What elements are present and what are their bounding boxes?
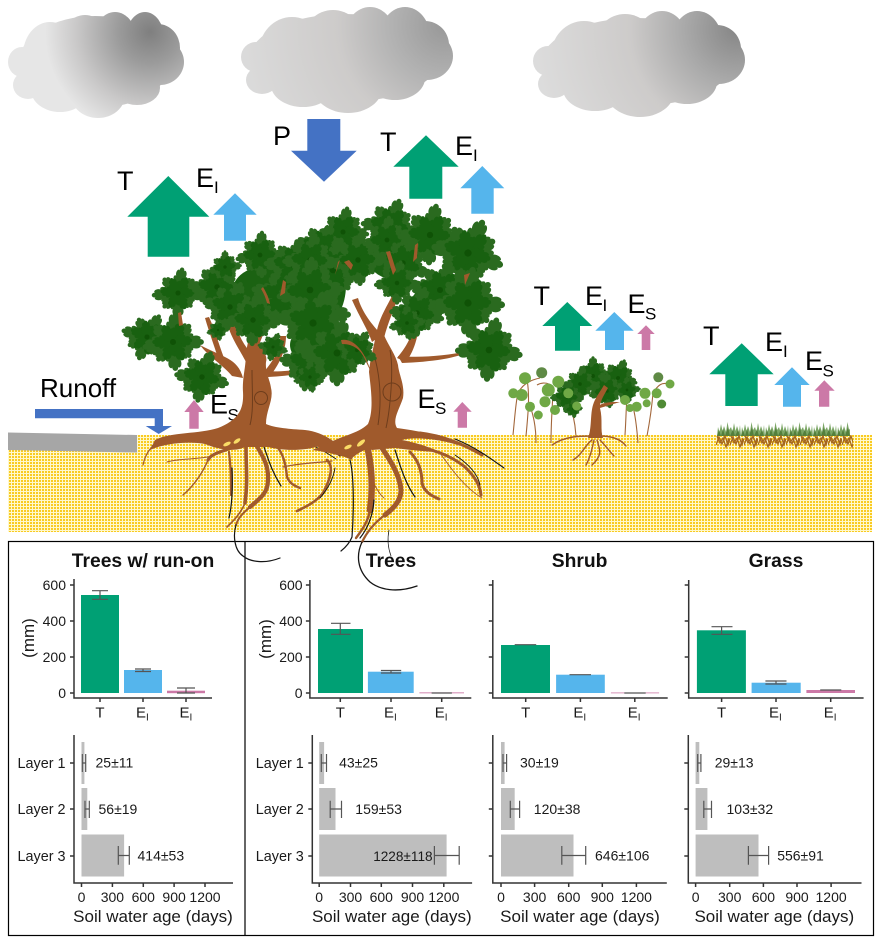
flux bar chart: E (628, 704, 638, 722)
soil water age bar chart: 900 (591, 889, 614, 905)
soil water age bar chart: 56±19 (98, 801, 138, 817)
soil water age bar chart: Soil water age (days) (73, 907, 233, 926)
flux bar chart: I (779, 712, 782, 724)
soil water age bar chart: 103±32 (726, 801, 773, 817)
soil water age bar chart: Layer 3 (18, 849, 66, 865)
soil water age bar chart: 600 (132, 889, 155, 905)
soil evaporation arrow right: E (418, 384, 436, 414)
flux bar chart: 0 (295, 685, 303, 701)
soil water age bar chart: 159±53 (355, 801, 402, 817)
flux bar chart: (mm) (19, 618, 38, 658)
grass flux arrows: S (822, 362, 834, 380)
soil water age bar chart: 600 (557, 889, 581, 905)
soil water age bar chart: 1200 (189, 889, 221, 905)
left tree flux arrows: T (117, 166, 134, 196)
soil water age bar chart: 0 (692, 889, 700, 905)
cloud 3 (533, 11, 745, 117)
flux bar chart: E (384, 704, 394, 722)
heading: Trees w/ run-on (72, 551, 214, 572)
shrub flux arrows: E (585, 281, 603, 311)
roots (143, 432, 504, 590)
heading: Grass (749, 551, 803, 572)
grass blades (717, 421, 850, 436)
flux bar chart (19, 577, 212, 724)
grass roots (716, 435, 853, 449)
flux bar chart: T (95, 704, 105, 722)
cloud 1 (8, 12, 184, 118)
soil water age bar chart: 600 (752, 889, 775, 905)
soil water age bar chart: 414±53 (138, 848, 184, 864)
flux bar chart: I (583, 712, 586, 724)
shrub illustration (508, 352, 674, 465)
flux bar chart: E (180, 704, 190, 722)
flux bar chart: 200 (43, 649, 66, 665)
soil (8, 435, 872, 532)
trunks and branches (150, 296, 468, 458)
flux bar chart: I (445, 712, 447, 724)
precipitation arrow P (273, 119, 357, 182)
panel: Grass (684, 551, 864, 926)
soil water age bar chart: 0 (315, 889, 323, 905)
flux bar chart: I (190, 712, 192, 724)
flux bar chart: I (638, 712, 641, 724)
soil evaporation arrow left: E (210, 390, 228, 420)
right tree flux arrows: E (455, 131, 473, 161)
flux bar chart: T (521, 704, 530, 722)
shrub flux arrows: E (628, 289, 646, 319)
flux bar chart: E (824, 704, 834, 722)
flux bar chart: 600 (279, 577, 303, 593)
shrub leaves (508, 367, 674, 420)
right tree flux arrows: T (380, 127, 396, 157)
panel: Trees w/ run-on (18, 551, 233, 926)
soil water age bar chart: 300 (101, 889, 124, 905)
soil water age bar chart: 120±38 (534, 801, 581, 817)
grass flux arrows: E (805, 346, 823, 376)
soil water age bar chart: 556±91 (777, 848, 824, 864)
soil water age bar chart (18, 735, 233, 926)
soil water age bar chart: 900 (785, 889, 809, 905)
soil water age bar chart: 29±13 (715, 754, 754, 770)
flux bar chart: E (136, 704, 146, 722)
left tree flux arrows: I (214, 178, 219, 197)
flux bar chart: E (435, 704, 445, 722)
grass illustration (716, 421, 853, 449)
soil water age bar chart: Soil water age (days) (694, 907, 854, 926)
shrub flux arrows: I (602, 296, 607, 315)
panel: Trees (256, 551, 472, 926)
soil evaporation arrow right (418, 384, 472, 428)
right tree flux arrows: I (473, 146, 478, 165)
flux bar chart: (mm) (256, 619, 275, 659)
shrub flux arrows: T (534, 281, 550, 311)
canopy mass (136, 223, 486, 367)
soil water age bar chart: 646±106 (595, 848, 650, 864)
grass flux arrows: E (765, 327, 783, 357)
soil water age bar chart: 600 (370, 889, 393, 905)
panel frame: charts (8, 541, 874, 936)
soil water age bar chart: 900 (162, 889, 186, 905)
flux bar chart: 0 (58, 685, 66, 701)
soil water age bar chart: 1200 (621, 889, 652, 905)
soil water age bar chart: Layer 1 (256, 756, 304, 772)
soil evaporation arrow left (184, 390, 239, 429)
flux bar chart: 400 (43, 613, 66, 629)
soil evaporation arrow right: S (435, 399, 446, 418)
flux bar chart: I (394, 712, 397, 724)
flux bar chart (489, 580, 668, 724)
heading: Shrub (552, 551, 607, 572)
shrub stems (513, 378, 668, 443)
root gaps (223, 437, 366, 450)
soil water age bar chart: 900 (401, 889, 424, 905)
soil water age bar chart: Soil water age (days) (312, 907, 472, 926)
paved slab (8, 432, 137, 452)
left tree flux arrows (117, 163, 257, 257)
runoff arrow: Runoff (40, 373, 117, 403)
flux bar chart: T (717, 704, 726, 722)
flux bar chart: 400 (279, 613, 303, 629)
flux bar chart: E (769, 704, 779, 722)
soil water age bar chart (489, 735, 667, 926)
flux bar chart: I (834, 712, 836, 724)
left tree flux arrows: E (196, 163, 214, 193)
grass flux arrows: T (703, 321, 720, 351)
flux bar chart: E (573, 704, 583, 722)
soil evaporation arrow left: S (228, 406, 239, 424)
cloud 2 (241, 7, 453, 113)
shrub trunk and roots (552, 385, 626, 465)
soil water age bar chart: 300 (523, 889, 546, 905)
soil water age bar chart: Layer 2 (18, 802, 66, 818)
soil water age bar chart: 30±19 (520, 754, 559, 770)
soil water age bar chart: 1200 (428, 889, 460, 905)
panel: Shrub (489, 551, 668, 926)
soil water age bar chart: 300 (718, 889, 742, 905)
trees with roots (110, 188, 531, 590)
foliage (110, 188, 531, 412)
grass flux arrows: I (783, 342, 788, 361)
flux bar chart: 200 (279, 649, 303, 665)
flux bar chart: T (336, 704, 345, 722)
soil water age bar chart: Layer 2 (256, 802, 304, 818)
clouds (8, 7, 745, 118)
soil water age bar chart: 25±11 (96, 754, 134, 770)
soil water age bar chart: 0 (78, 889, 86, 905)
soil water age bar chart: 0 (497, 889, 505, 905)
soil water age bar chart: Soil water age (days) (500, 907, 660, 926)
branch pieces over foliage (178, 243, 470, 372)
shrub flux arrows: S (645, 304, 656, 324)
flux bar chart: 600 (43, 577, 66, 593)
runoff arrow (35, 373, 172, 434)
right tree flux arrows (380, 127, 504, 214)
grass flux arrows (703, 321, 835, 407)
soil water age bar chart: 43±25 (339, 754, 378, 770)
shrub flux arrows (534, 281, 656, 351)
soil water age bar chart: 300 (339, 889, 362, 905)
heading: Trees (366, 551, 416, 572)
flux bar chart (685, 580, 864, 724)
soil water age bar chart (256, 735, 472, 926)
precipitation arrow P: P (273, 121, 291, 151)
soil water age bar chart: 1228±118 (373, 849, 433, 864)
flux bar chart (256, 577, 471, 724)
soil water age bar chart (684, 735, 862, 926)
soil water age bar chart: Layer 3 (256, 849, 304, 865)
soil water age bar chart: 1200 (816, 889, 847, 905)
soil water age bar chart: Layer 1 (18, 756, 66, 772)
flux bar chart: I (146, 712, 149, 724)
trunk knots (250, 350, 401, 428)
shrub canopy (546, 352, 644, 419)
